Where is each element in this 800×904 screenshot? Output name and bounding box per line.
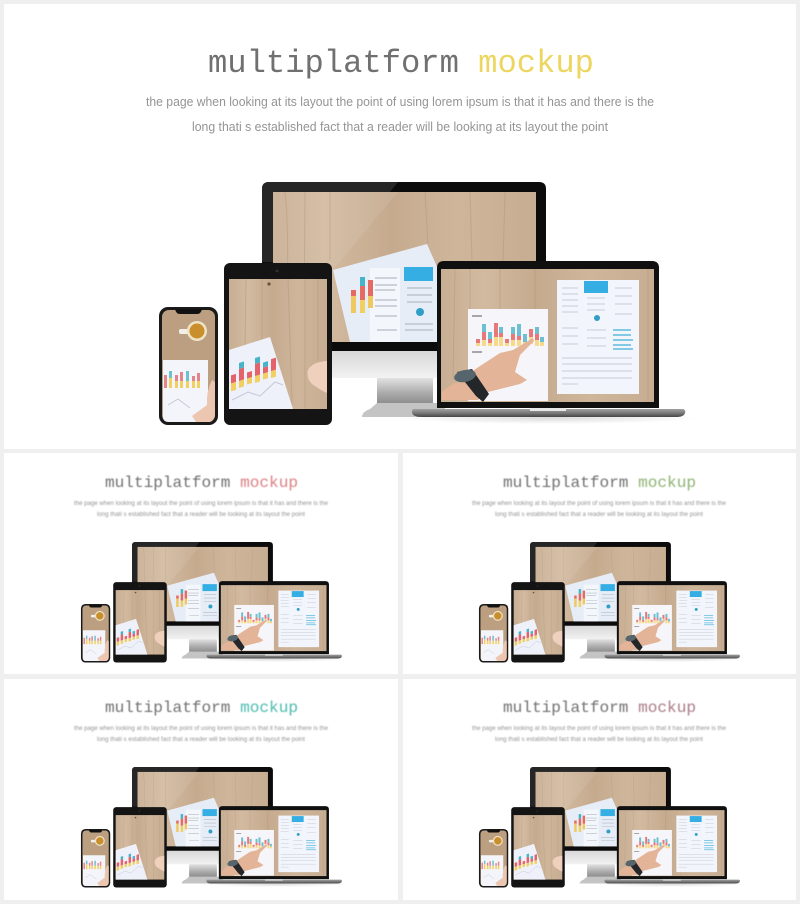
description: teal variant: long thati s established fact that a reader will be looking at its layout the point	[97, 736, 305, 743]
description: red variant	[74, 500, 328, 518]
title: teal variant: multiplatform mockup	[105, 699, 298, 717]
title: mauve variant: multiplatform mockup	[503, 699, 696, 717]
device mockups: green variant	[479, 542, 747, 662]
panel: main yellow mockup slide	[4, 4, 796, 449]
description text: long thati s established fact that a reader will be looking at its layout the point	[192, 119, 608, 134]
description: mauve variant: the page when looking at its layout the point of using lorem ipsum is that it has and there is the	[472, 725, 726, 732]
description: teal variant: the page when looking at its layout the point of using lorem ipsum is that it has and there is the	[74, 725, 328, 732]
description: green variant: long thati s established fact that a reader will be looking at its layout the point	[495, 511, 703, 518]
description: mauve variant	[472, 725, 726, 743]
description: green variant: the page when looking at its layout the point of using lorem ipsum is that it has and there is the	[472, 500, 726, 507]
description: green variant	[472, 500, 726, 518]
panel: red mockup slide	[4, 453, 398, 674]
title: multiplatform mockup: multiplatform mockup	[208, 45, 594, 82]
title: green variant: multiplatform mockup	[503, 474, 696, 492]
description: red variant: long thati s established fact that a reader will be looking at its layout the point	[97, 511, 305, 518]
device mockups: phone, tablet, monitor, laptop	[159, 182, 700, 425]
panel: green mockup slide	[403, 453, 796, 674]
description: red variant: the page when looking at its layout the point of using lorem ipsum is that it has and there is the	[74, 500, 328, 507]
device mockups: red variant	[81, 542, 349, 662]
device mockups: teal variant	[81, 767, 349, 888]
device mockups: mauve variant	[479, 767, 747, 888]
description text: the page when looking at its layout the point of using lorem ipsum is that it has and there is the	[146, 94, 654, 109]
description: teal variant	[74, 725, 328, 743]
description text	[146, 94, 654, 134]
description: mauve variant: long thati s established fact that a reader will be looking at its layout the point	[495, 736, 703, 743]
panel: teal mockup slide	[4, 679, 398, 900]
title: red variant: multiplatform mockup	[105, 474, 298, 492]
panel: mauve mockup slide	[403, 679, 796, 900]
